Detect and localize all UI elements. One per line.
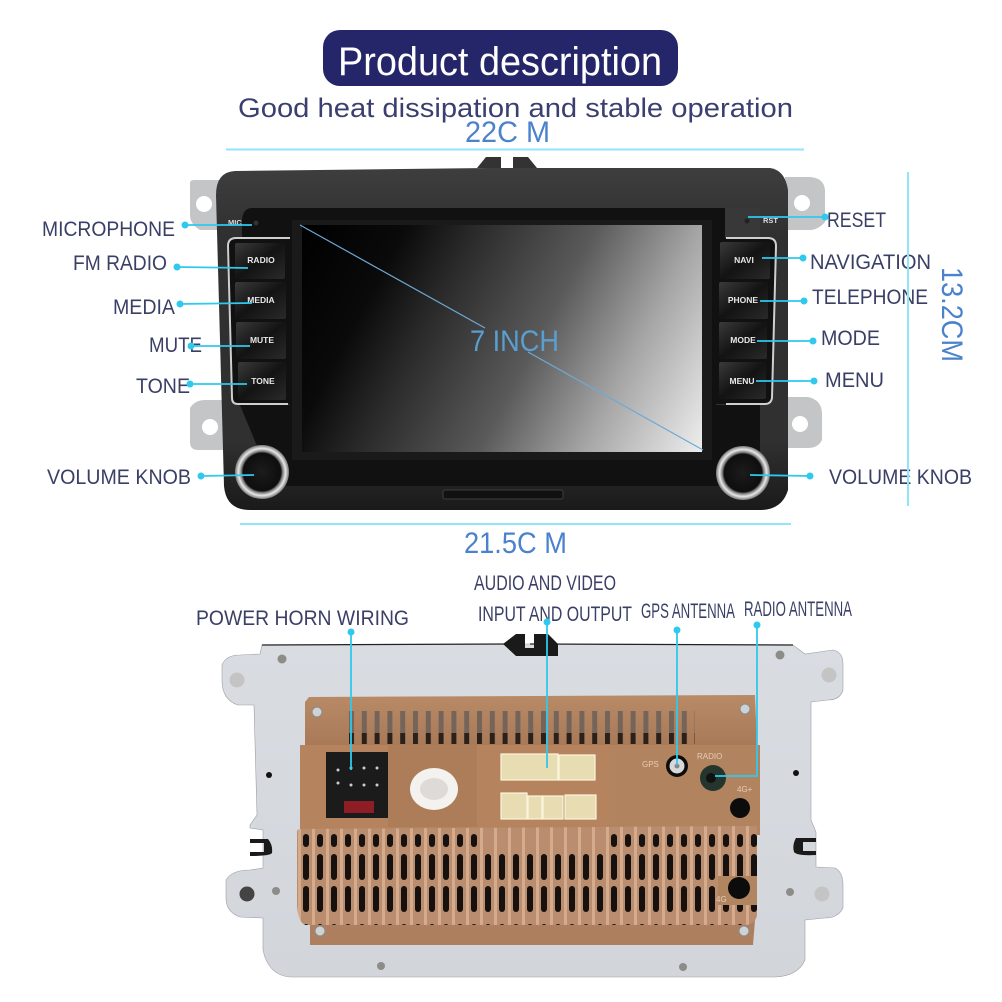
label: gps antenna: GPS ANTENNA bbox=[641, 600, 735, 623]
label: telephone: TELEPHONE bbox=[812, 286, 928, 309]
screen bbox=[302, 225, 702, 452]
mounting brackets bbox=[190, 177, 825, 450]
right button group: PHONE bbox=[728, 295, 758, 305]
label: tone bbox=[136, 375, 247, 398]
label: menu bbox=[756, 369, 884, 392]
sticker panel bbox=[388, 745, 477, 827]
top vents bbox=[349, 711, 695, 744]
knobs bbox=[235, 445, 289, 499]
audio video connectors bbox=[501, 754, 596, 819]
bottom slot bbox=[443, 490, 563, 499]
label: mode bbox=[757, 327, 880, 350]
label: mode: MODE bbox=[821, 327, 880, 350]
label: reset bbox=[748, 209, 886, 232]
screen diagonal bbox=[300, 225, 703, 450]
metal plate bbox=[222, 644, 843, 977]
gps connector: GPS bbox=[642, 760, 659, 769]
antenna holes: 4G bbox=[716, 895, 727, 904]
inner fascia bbox=[240, 208, 760, 486]
screen bezel bbox=[292, 220, 712, 460]
dimension: height: 13.2CM bbox=[935, 267, 968, 362]
label: fm radio: FM RADIO bbox=[73, 252, 167, 275]
vent cover right bbox=[718, 876, 757, 905]
label: reset: RESET bbox=[827, 209, 886, 232]
gps connector bbox=[642, 755, 688, 777]
label: volume knob right: VOLUME KNOB bbox=[829, 466, 972, 489]
label: mute: MUTE bbox=[149, 334, 202, 357]
body screws bbox=[312, 704, 750, 936]
label: fm radio bbox=[73, 252, 248, 275]
left button group: MUTE bbox=[250, 335, 274, 345]
lower vents bbox=[297, 826, 757, 925]
label: radio antenna bbox=[715, 598, 852, 776]
housing bbox=[216, 168, 788, 510]
label: mute bbox=[149, 334, 250, 357]
screen size label: 7 INCH bbox=[470, 325, 559, 358]
label: radio antenna: RADIO ANTENNA bbox=[744, 598, 852, 621]
antenna holes: 4G+ bbox=[737, 785, 753, 794]
wiring connector bbox=[326, 752, 388, 818]
right button group bbox=[716, 238, 776, 404]
right button group: NAVI bbox=[734, 255, 754, 265]
label: microphone bbox=[42, 218, 252, 241]
label: audio and video: INPUT AND OUTPUT bbox=[478, 603, 632, 626]
dimension: top width: 22C M bbox=[465, 116, 550, 149]
label: power horn wiring: POWER HORN WIRING bbox=[196, 607, 409, 630]
brown middle section bbox=[300, 745, 760, 835]
plate screws bbox=[272, 650, 794, 971]
label: volume knob left: VOLUME KNOB bbox=[47, 466, 191, 489]
right button group: MODE bbox=[730, 335, 756, 345]
label: menu: MENU bbox=[825, 369, 884, 392]
radio connector bbox=[697, 752, 726, 791]
ear holes bbox=[230, 668, 836, 902]
label: audio and video bbox=[474, 572, 632, 768]
label: volume knob right bbox=[750, 466, 972, 489]
top clip bbox=[503, 634, 558, 656]
label: audio and video: AUDIO AND VIDEO bbox=[474, 572, 616, 595]
subtitle: Good heat dissipation and stable operation bbox=[238, 93, 793, 123]
label: telephone bbox=[760, 286, 928, 309]
left button group: RADIO bbox=[247, 255, 275, 265]
label: media bbox=[113, 296, 252, 319]
front head unit bbox=[190, 157, 825, 510]
label: media: MEDIA bbox=[113, 296, 175, 319]
rear view of unit bbox=[222, 634, 843, 977]
left button group: TONE bbox=[251, 376, 275, 386]
left button group bbox=[227, 238, 290, 404]
label: tone: TONE bbox=[136, 375, 190, 398]
left button group: MEDIA bbox=[247, 295, 275, 305]
front head unit: RST bbox=[763, 216, 778, 225]
side notches bbox=[250, 838, 816, 856]
label: power horn wiring bbox=[196, 607, 409, 770]
label: navigation: NAVIGATION bbox=[810, 251, 931, 274]
bottom strip bbox=[310, 920, 755, 945]
mic and reset labels: MIC bbox=[228, 218, 242, 227]
top clip bbox=[477, 157, 537, 168]
antenna holes bbox=[716, 785, 753, 904]
brown top section bbox=[305, 695, 757, 745]
label: microphone: MICROPHONE bbox=[42, 218, 175, 241]
radio connector: RADIO bbox=[697, 752, 722, 761]
right panel bbox=[609, 746, 760, 826]
dimension: bottom width: 21.5C M bbox=[464, 527, 567, 560]
unslotted rib section bbox=[477, 828, 611, 850]
label: navigation bbox=[762, 251, 931, 274]
title: Product description bbox=[338, 40, 662, 84]
label: gps antenna bbox=[641, 600, 735, 765]
right button group: MENU bbox=[729, 376, 755, 386]
